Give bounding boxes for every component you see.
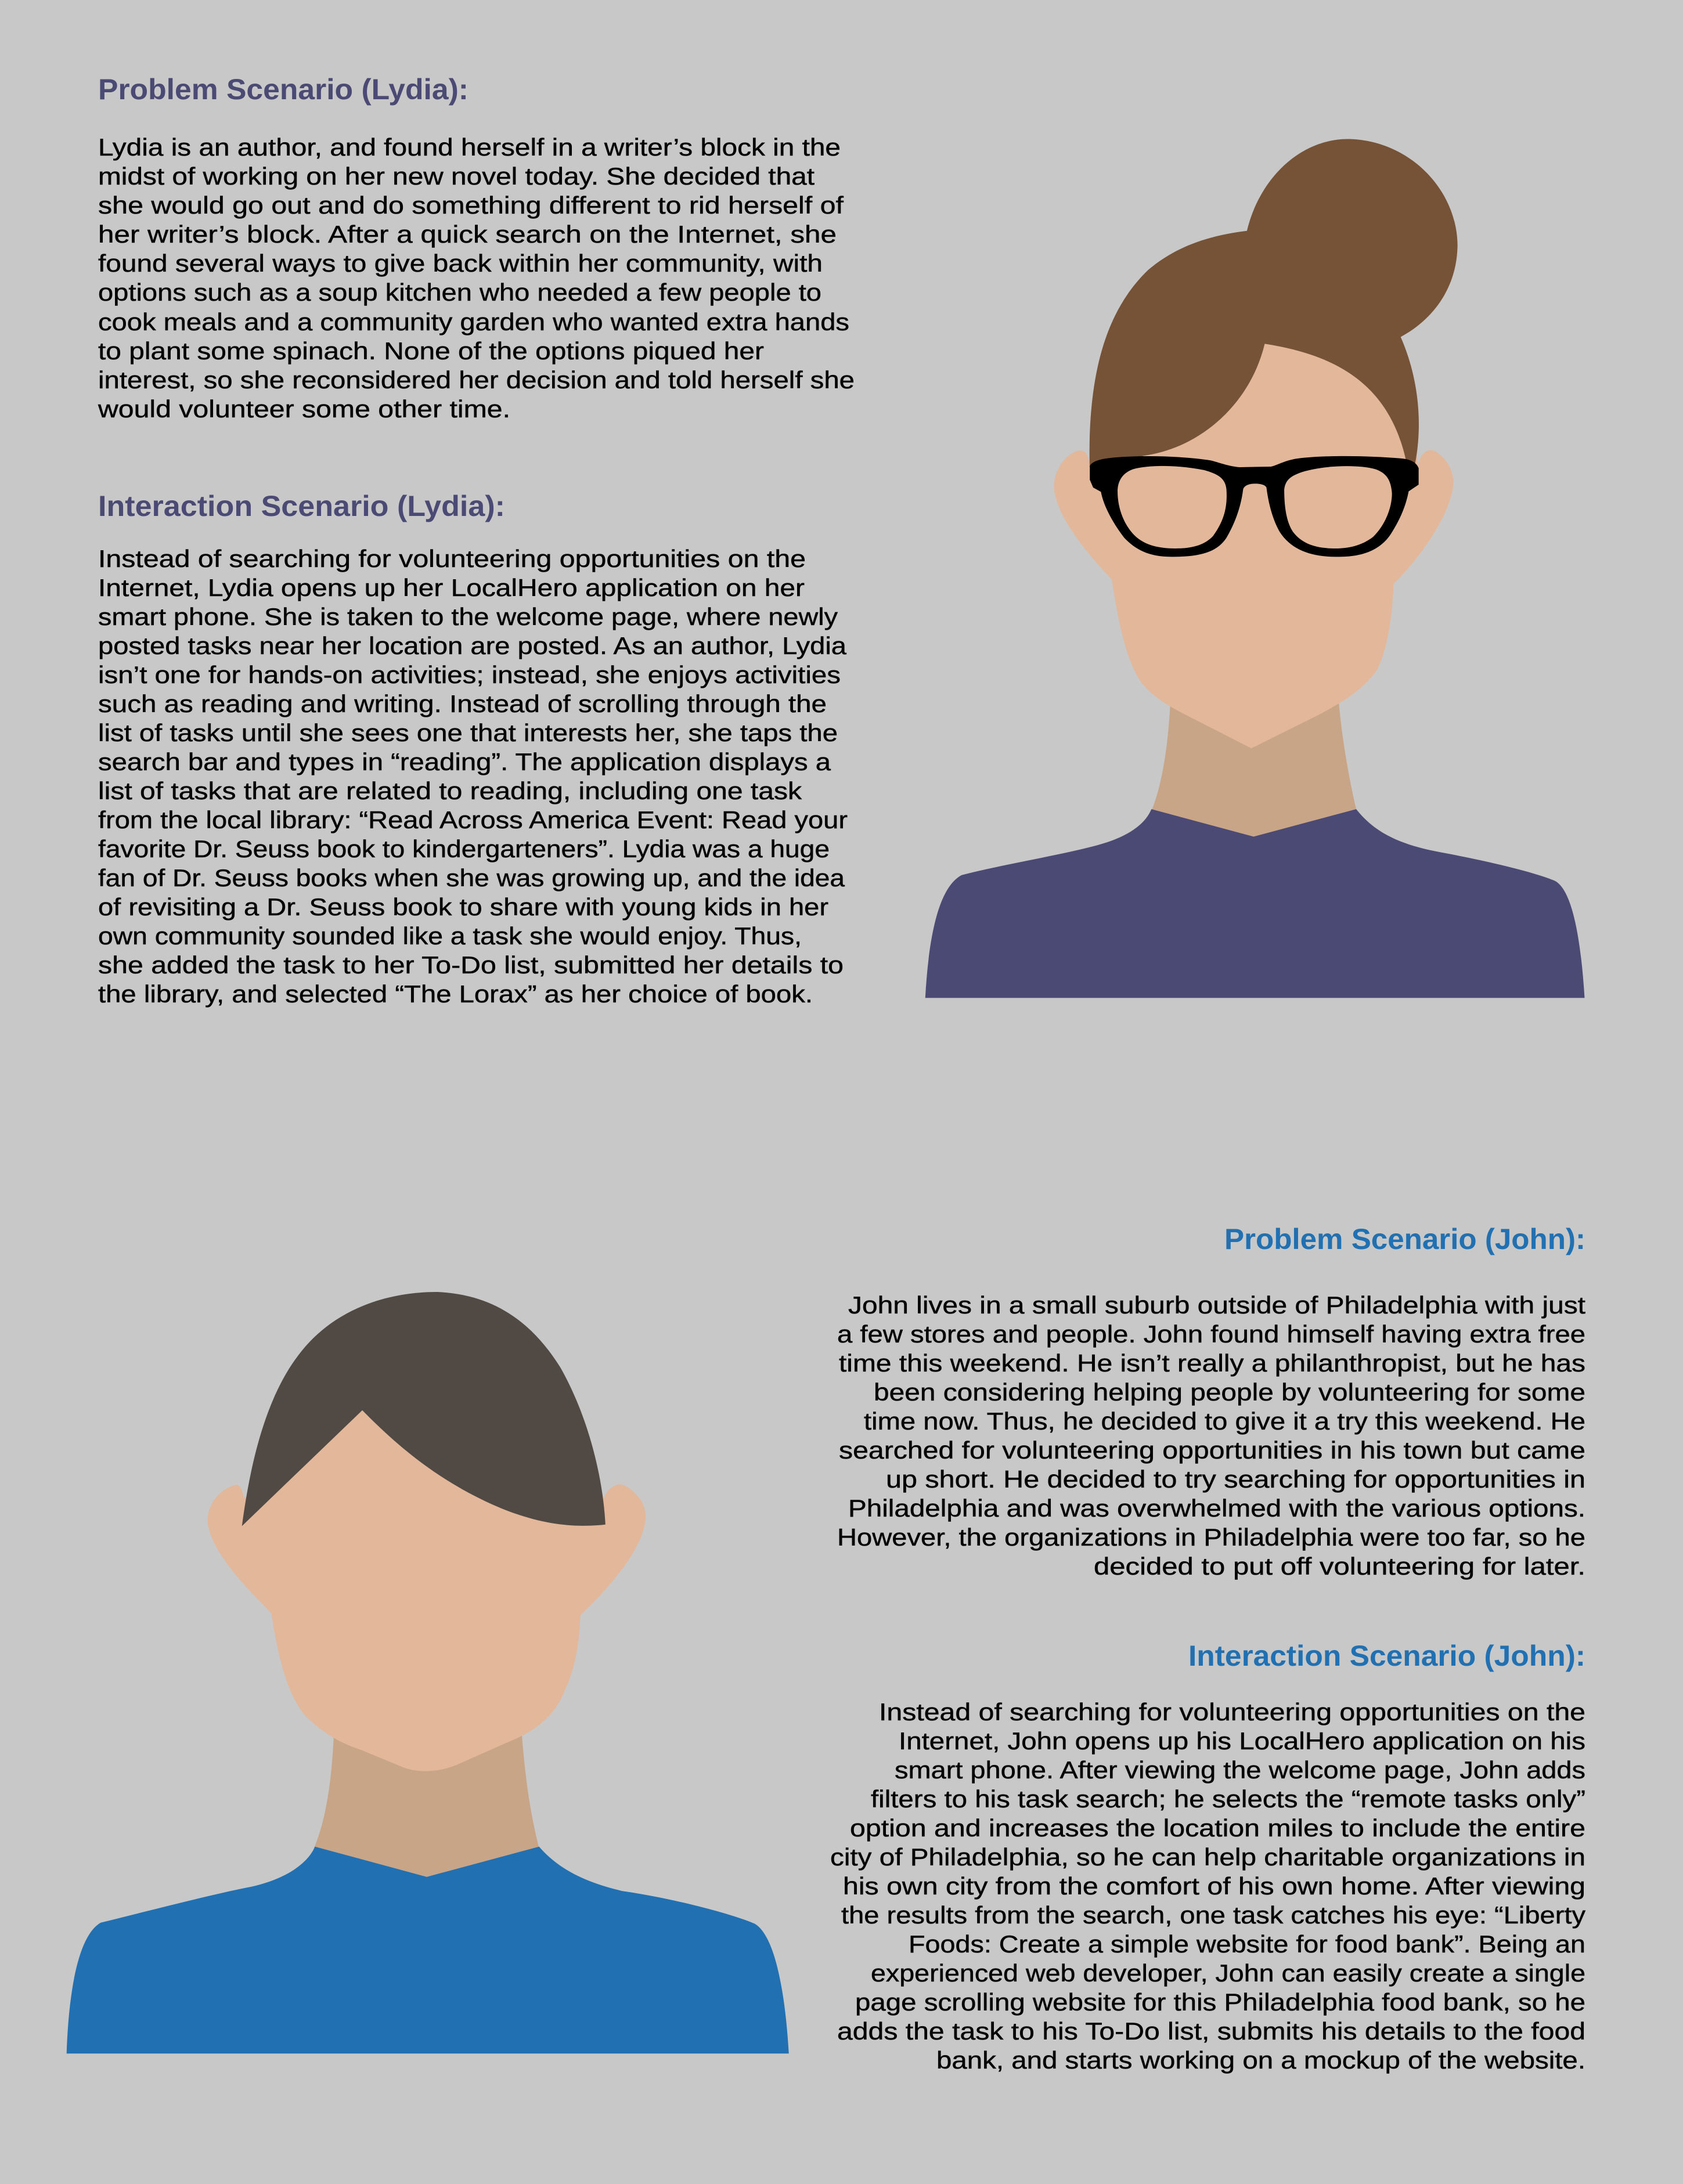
hair: [242, 1292, 606, 1526]
text block: Lydia problem scenario: midst of working on her new novel today. She decided that: [98, 163, 815, 190]
text block: John interaction scenario: the results from the search, one task catches his eye: “Liberty: [841, 1901, 1585, 1929]
text block: John interaction scenario: his own city from the comfort of his own home. After viewing: [843, 1872, 1585, 1900]
text block: Lydia interaction scenario: the library, and selected “The Lorax” as her choice of book.: [98, 980, 813, 1008]
glasses frame: [1090, 456, 1419, 557]
text block: John problem scenario: time now. Thus, he decided to give it a try this weekend. He: [864, 1407, 1585, 1435]
neck: [1151, 698, 1357, 840]
text block: John problem scenario: John lives in a small suburb outside of Philadelphia with just: [848, 1291, 1585, 1319]
text block: Lydia problem scenario: her writer’s block. After a quick search on the Internet, she: [98, 221, 837, 248]
text block: John interaction scenario: experienced web developer, John can easily create a single: [871, 1959, 1585, 1987]
left lens: [1118, 466, 1227, 548]
text block: Lydia problem scenario: she would go out and do something different to rid herself of: [98, 192, 844, 219]
text block: John interaction scenario: smart phone. After viewing the welcome page, John adds: [895, 1756, 1585, 1784]
text block: Lydia interaction scenario: Internet, Lydia opens up her LocalHero application on her: [98, 574, 805, 601]
text block: Lydia interaction scenario: of revisiting a Dr. Seuss book to share with young kids in her: [98, 893, 828, 920]
icon: John portrait: [67, 1292, 789, 2053]
heading: Problem Scenario (Lydia): Problem Scenario (Lydia):: [98, 73, 468, 106]
text block: Lydia problem scenario: [98, 133, 855, 423]
text block: John interaction scenario: bank, and starts working on a mockup of the website.: [936, 2046, 1585, 2074]
text block: Lydia interaction scenario: isn’t one for hands-on activities; instead, she enjoys activities: [98, 661, 841, 688]
text block: Lydia problem scenario: Lydia is an author, and found herself in a writer’s block in the: [98, 133, 841, 161]
text block: Lydia interaction scenario: smart phone. She is taken to the welcome page, where newly: [98, 603, 838, 630]
text block: Lydia interaction scenario: list of tasks that are related to reading, including one task: [98, 777, 802, 804]
text block: John interaction scenario: Foods: Create a simple website for food bank”. Being an: [909, 1930, 1585, 1958]
neck: [314, 1730, 539, 1878]
text block: Lydia problem scenario: would volunteer some other time.: [98, 395, 510, 423]
text block: John interaction scenario: option and increases the location miles to include the entire: [850, 1814, 1585, 1842]
text block: John problem scenario: time this weekend. He isn’t really a philanthropist, but he has: [839, 1349, 1585, 1377]
text block: Lydia problem scenario: to plant some spinach. None of the options piqued her: [98, 337, 764, 364]
text block: Lydia interaction scenario: fan of Dr. Seuss books when she was growing up, and the idea: [98, 864, 845, 891]
text block: John interaction scenario: [830, 1698, 1585, 2074]
text block: Lydia interaction scenario: [98, 545, 848, 1008]
text block: Lydia interaction scenario: posted tasks near her location are posted. As an author, Lydia: [98, 632, 847, 659]
heading: Interaction Scenario (John): Interaction Scenario (John):: [1188, 1640, 1585, 1672]
text block: Lydia interaction scenario: list of tasks until she sees one that interests her, she taps the: [98, 719, 838, 746]
text block: Lydia problem scenario: options such as a soup kitchen who needed a few people to: [98, 279, 821, 306]
shirt: [925, 809, 1584, 998]
icon: Lydia portrait: [925, 139, 1584, 998]
text block: John problem scenario: [837, 1291, 1585, 1580]
text block: John interaction scenario: city of Philadelphia, so he can help charitable organizations in: [830, 1843, 1585, 1871]
text block: Lydia interaction scenario: from the local library: “Read Across America Event: Read your: [98, 806, 848, 833]
text block: John problem scenario: searched for volunteering opportunities in his town but came: [839, 1436, 1585, 1464]
text block: Lydia interaction scenario: favorite Dr. Seuss book to kindergarteners”. Lydia was a huge: [98, 835, 830, 862]
text block: John problem scenario: a few stores and people. John found himself having extra free: [837, 1320, 1585, 1348]
glasses: [1090, 456, 1419, 557]
shirt: [67, 1847, 789, 2053]
text block: John interaction scenario: Instead of searching for volunteering opportunities on the: [879, 1698, 1585, 1725]
panel: John scenarios: [830, 1223, 1585, 2074]
text block: John interaction scenario: Internet, John opens up his LocalHero application on his: [899, 1727, 1585, 1755]
text block: Lydia interaction scenario: own community sounded like a task she would enjoy. Thus,: [98, 922, 802, 950]
text block: John problem scenario: Philadelphia and was overwhelmed with the various options.: [848, 1494, 1585, 1522]
text block: Lydia problem scenario: interest, so she reconsidered her decision and told herself she: [98, 366, 855, 394]
text block: Lydia interaction scenario: she added the task to her To-Do list, submitted her details to: [98, 951, 844, 979]
text block: John problem scenario: decided to put off volunteering for later.: [1094, 1553, 1585, 1580]
text block: John interaction scenario: filters to his task search; he selects the “remote tasks only”: [871, 1785, 1585, 1813]
text block: John interaction scenario: adds the task to his To-Do list, submits his details to the food: [837, 2017, 1585, 2045]
face and ears: [208, 1388, 646, 1771]
text block: John problem scenario: been considering helping people by volunteering for some: [874, 1378, 1585, 1406]
text block: Lydia interaction scenario: Instead of searching for volunteering opportunities on the: [98, 545, 806, 572]
text block: John interaction scenario: page scrolling website for this Philadelphia food bank, so he: [855, 1988, 1585, 2016]
text block: Lydia problem scenario: cook meals and a community garden who wanted extra hands: [98, 308, 849, 335]
text block: Lydia interaction scenario: search bar and types in “reading”. The application displays a: [98, 748, 831, 775]
panel: Lydia scenarios: [98, 73, 855, 1008]
text block: John problem scenario: However, the organizations in Philadelphia were too far, so he: [837, 1524, 1585, 1551]
heading: Problem Scenario (John): Problem Scenario (John):: [1224, 1223, 1585, 1255]
heading: Interaction Scenario (Lydia): Interaction Scenario (Lydia):: [98, 490, 505, 522]
text block: Lydia problem scenario: found several ways to give back within her community, with: [98, 250, 823, 277]
face and ears: [1054, 334, 1454, 748]
text block: John problem scenario: up short. He decided to try searching for opportunities in: [886, 1465, 1585, 1493]
right lens: [1284, 466, 1392, 548]
hair with bun: [1090, 139, 1458, 467]
text block: Lydia interaction scenario: such as reading and writing. Instead of scrolling through the: [98, 690, 827, 717]
